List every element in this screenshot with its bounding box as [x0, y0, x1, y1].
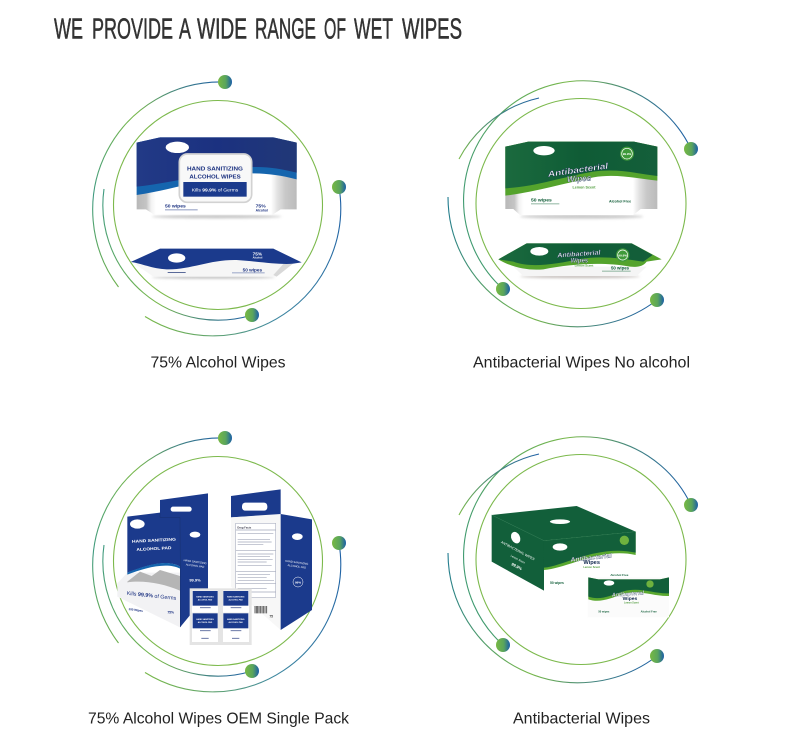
panel: 75% alcohol wipes [93, 75, 346, 372]
flat pack: 75% [253, 252, 263, 257]
small pack: Antibacterial [611, 591, 644, 599]
flat pack [498, 243, 662, 278]
sachets sheet: HAND SANITIZING [196, 595, 214, 598]
right box: Drug Facts [237, 525, 252, 529]
sachets sheet: ALCOHOL PAD [198, 598, 213, 601]
flat pack: Lemon Scent [575, 264, 593, 268]
product: blue alcohol wipes packs [131, 137, 302, 279]
left box: ALCOHOL PAD [186, 562, 205, 569]
sachets sheet: ALCOHOL PAD [228, 621, 243, 624]
panel: 75% alcohol wipes OEM single pack [88, 431, 350, 728]
sachets sheet: ALCOHOL PAD [228, 598, 243, 601]
flat pack: Wipes [571, 259, 589, 265]
left box: Kills 99.9% of Germs [126, 591, 177, 602]
product: green antibacterial packs [498, 142, 662, 278]
title: PROVIDE [92, 14, 173, 46]
left box: HAND SANITIZING [132, 537, 176, 544]
panel: antibacterial wipes [448, 437, 698, 728]
flat pack: 50 wipes [611, 265, 630, 270]
large pack [505, 142, 657, 219]
large pack: Alcohol Free [609, 200, 631, 204]
small pack: Wipes [623, 596, 638, 602]
small pack: Lemon Scent [624, 601, 639, 604]
right box [231, 489, 312, 630]
large pack [137, 137, 297, 218]
title: WIDE [197, 14, 247, 46]
product: green carton and pack [492, 506, 669, 617]
ring graphic [448, 81, 698, 327]
sachets sheet: HAND SANITIZING [227, 595, 245, 598]
ring graphic [93, 75, 346, 336]
title: WIPES [402, 14, 462, 46]
caption: Antibacterial Wipes No alcohol [473, 354, 690, 372]
carton: Alcohol Free [610, 573, 629, 577]
large pack: ALCOHOL WIPES [189, 175, 241, 181]
left box: 99.9% [189, 578, 201, 583]
ring graphic [448, 437, 698, 683]
carton: Wipes [583, 560, 600, 566]
carton: Antibacterial [569, 552, 613, 564]
large pack: 75% [256, 204, 266, 210]
ring graphic [93, 431, 346, 692]
title: A [179, 14, 191, 46]
caption: 75% Alcohol Wipes [150, 354, 286, 372]
flat pack: 99.9% [618, 253, 627, 257]
carton [492, 506, 636, 591]
left box: ALCOHOL PAD [136, 545, 172, 552]
large pack: 99.9% [623, 152, 632, 156]
flat pack: Alcohol [253, 256, 263, 260]
large pack: Wipes [567, 173, 592, 184]
sachets sheet: HAND SANITIZING [196, 618, 214, 621]
product: blue boxes and sachets [117, 489, 312, 645]
large pack: Lemon Scent [573, 185, 596, 189]
large pack: Kills 99.9% of Germs [192, 187, 239, 193]
left box: 75% [167, 610, 174, 614]
carton: 99.9% [511, 561, 523, 571]
title: RANGE [255, 14, 316, 46]
sachets sheet: HAND SANITIZING [227, 618, 245, 621]
small pack [588, 577, 669, 617]
panel: antibacterial wipes no alcohol [448, 81, 698, 372]
caption: 75% Alcohol Wipes OEM Single Pack [88, 710, 350, 728]
title: WET [354, 14, 393, 46]
left box: 100 Wipes [128, 607, 144, 613]
large pack: Antibacterial [546, 160, 609, 179]
left box [117, 493, 208, 627]
right box: ALCOHOL PAD [287, 563, 306, 570]
small pack: Alcohol Free [641, 610, 657, 614]
flat pack: 50 wipes [243, 267, 262, 272]
title: WE [54, 14, 83, 46]
flat pack [131, 249, 302, 279]
sachets sheet: ALCOHOL PAD [198, 621, 213, 624]
caption: Antibacterial Wipes [513, 710, 650, 728]
carton: Lemon Scent [510, 554, 526, 565]
left box: HAND SANITIZING [183, 558, 207, 565]
right box: 75 [269, 614, 273, 618]
carton: ANTIBACTERIAL WIPES [500, 540, 536, 562]
large pack: 50 wipes [531, 198, 552, 204]
carton: Lemon Scent [583, 565, 600, 569]
title: OF [324, 14, 346, 46]
small pack: 50 wipes [598, 609, 610, 613]
carton: 50 wipes [550, 581, 564, 585]
flat pack: Antibacterial [556, 249, 601, 260]
sachets sheet [190, 588, 252, 645]
large pack: 50 wipes [165, 203, 186, 209]
large pack: Alcohol [256, 209, 268, 213]
title [54, 14, 462, 46]
right box: HAND SANITIZING [285, 559, 309, 566]
right box: 99% [295, 580, 301, 584]
large pack: HAND SANITIZING [187, 167, 244, 173]
